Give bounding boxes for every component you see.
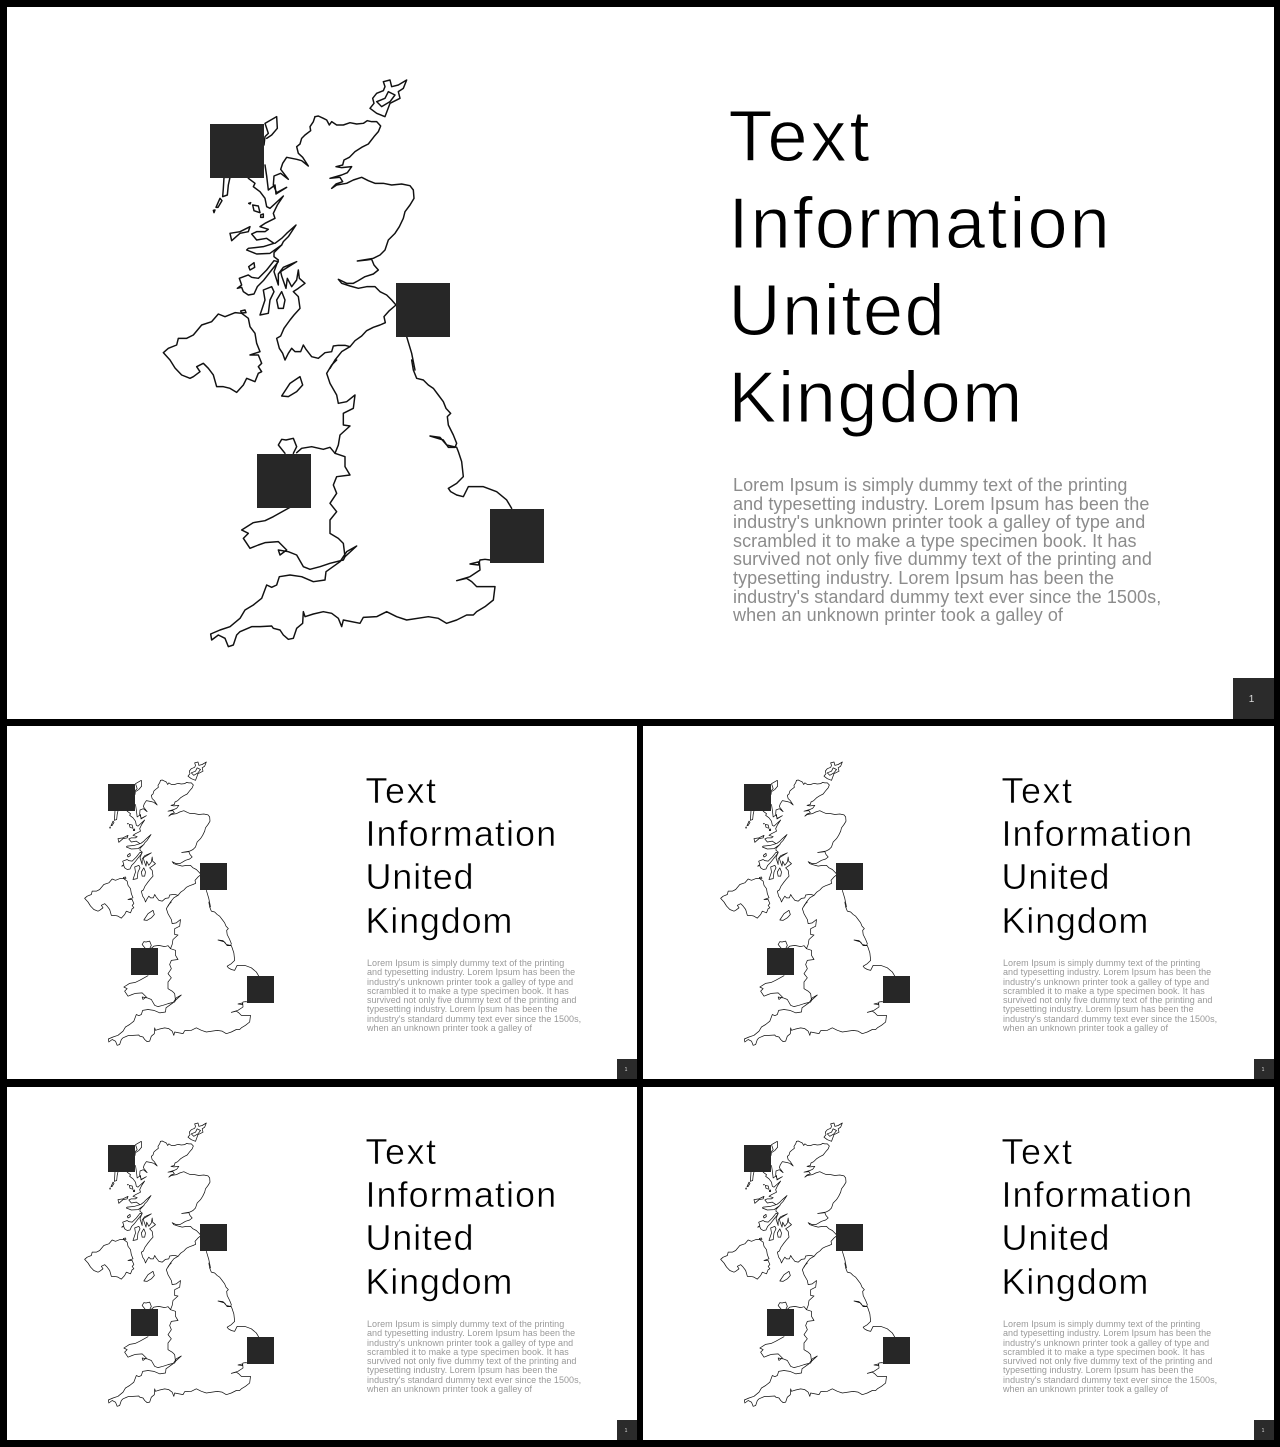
body text: typesetting industry. Lorem Ipsum has been the [733,568,1114,588]
heading: Text [1002,770,1074,810]
body text: when an unknown printer took a galley of [733,605,1063,625]
panel: thumbnail slide top right [643,726,1274,1079]
body text: and typesetting industry. Lorem Ipsum has been the [733,494,1149,514]
heading: Information [1002,1174,1193,1215]
map: United Kingdom outline [84,762,260,1046]
panel: thumbnail slide bottom right [643,1087,1274,1440]
heading: Information [1002,813,1193,854]
marker: north east England [200,863,227,890]
map: United Kingdom outline [84,1122,260,1407]
panel: thumbnail slide bottom left [7,1087,637,1440]
body text [367,958,581,1033]
body text: and typesetting industry. Lorem Ipsum has been the [367,967,575,977]
body text: Lorem Ipsum is simply dummy text of the printing [733,475,1128,495]
heading: Kingdom [366,900,513,941]
body text: scrambled it to make a type specimen book. It has [367,1347,569,1357]
heading: Kingdom [728,358,1024,438]
body text: industry's standard dummy text ever since the 1500s, [367,1014,581,1024]
heading: Text [366,1130,438,1172]
page number: 1 [1262,1067,1264,1073]
body text: typesetting industry. Lorem Ipsum has been the [367,1365,558,1375]
body text: industry's unknown printer took a galley of type and [1003,1338,1209,1348]
body text: industry's standard dummy text ever since the 1500s, [1003,1375,1217,1385]
body text: industry's standard dummy text ever since the 1500s, [733,587,1161,607]
page number [617,1420,637,1440]
body text: industry's unknown printer took a galley of type and [367,1338,573,1348]
marker: north west Scotland [108,1145,134,1172]
marker: north west Scotland [108,784,134,811]
body text [733,475,1161,625]
body text: Lorem Ipsum is simply dummy text of the printing [1003,1319,1200,1329]
body text: typesetting industry. Lorem Ipsum has been the [367,1004,558,1014]
body text: survived not only five dummy text of the printing and [733,549,1152,569]
heading: United [366,1217,474,1258]
body text [1003,1319,1217,1394]
body text: industry's unknown printer took a galley of type and [733,512,1145,532]
body text: and typesetting industry. Lorem Ipsum has been the [1003,967,1211,977]
page number [617,1059,637,1079]
body text: when an unknown printer took a galley of [367,1384,532,1394]
body text: industry's unknown printer took a galley of type and [1003,977,1209,987]
body text: survived not only five dummy text of the printing and [367,1356,576,1366]
body text: scrambled it to make a type specimen book. It has [733,531,1137,551]
body text: when an unknown printer took a galley of [367,1023,532,1033]
body text: and typesetting industry. Lorem Ipsum has been the [1003,1328,1211,1338]
heading: Kingdom [1002,900,1149,941]
body text: Lorem Ipsum is simply dummy text of the printing [1003,958,1200,968]
heading: United [728,271,946,351]
map: United Kingdom outline [720,1122,896,1407]
body text: and typesetting industry. Lorem Ipsum has been the [367,1328,575,1338]
panel: main slide [7,7,1274,719]
body text: Lorem Ipsum is simply dummy text of the printing [367,958,564,968]
heading: Kingdom [1002,1261,1149,1302]
heading [1002,1130,1193,1302]
body text: industry's unknown printer took a galley of type and [367,977,573,987]
marker: north west Scotland [210,124,264,178]
page number [1254,1420,1274,1440]
heading [1002,770,1193,941]
heading: United [366,856,474,897]
heading: Information [728,184,1112,264]
page number [1254,1059,1274,1079]
body text: Lorem Ipsum is simply dummy text of the printing [367,1319,564,1329]
body text: scrambled it to make a type specimen book. It has [1003,986,1205,996]
marker: East Anglia [247,976,274,1002]
heading: Text [1002,1130,1074,1172]
body text: survived not only five dummy text of the printing and [1003,995,1212,1005]
marker: north east England [836,1224,863,1251]
heading [728,97,1112,438]
marker: Wales [131,1309,158,1336]
marker: north west Scotland [744,784,770,811]
body text: when an unknown printer took a galley of [1003,1023,1168,1033]
map: United Kingdom outline [720,762,896,1046]
marker: East Anglia [883,976,910,1002]
heading [366,1130,557,1302]
marker: Wales [767,948,794,975]
marker: Wales [767,1309,794,1336]
body text: typesetting industry. Lorem Ipsum has been the [1003,1004,1194,1014]
marker: north east England [836,863,863,890]
marker: Wales [131,948,158,975]
body text [1003,958,1217,1033]
marker: East Anglia [490,509,544,563]
page number: 1 [625,1067,627,1073]
body text: scrambled it to make a type specimen book. It has [1003,1347,1205,1357]
heading: Kingdom [366,1261,513,1302]
heading: Information [366,1174,557,1215]
body text: typesetting industry. Lorem Ipsum has been the [1003,1365,1194,1375]
heading: United [1002,1217,1110,1258]
body text: industry's standard dummy text ever since the 1500s, [367,1375,581,1385]
body text [367,1319,581,1394]
heading [366,770,557,941]
page number [1233,678,1274,719]
panel: thumbnail slide top left [7,726,637,1079]
heading: United [1002,856,1110,897]
heading: Text [728,97,873,177]
map: United Kingdom outline [162,79,512,648]
marker: East Anglia [247,1336,274,1364]
marker: north east England [396,283,450,337]
page number: 1 [1249,694,1254,705]
heading: Text [366,770,438,810]
marker: East Anglia [883,1336,910,1364]
body text: scrambled it to make a type specimen book. It has [367,986,569,996]
marker: north east England [200,1224,227,1251]
heading: Information [366,813,557,854]
page number: 1 [625,1428,627,1434]
marker: north west Scotland [744,1145,770,1172]
body text: when an unknown printer took a galley of [1003,1384,1168,1394]
body text: survived not only five dummy text of the printing and [1003,1356,1212,1366]
page number: 1 [1262,1428,1264,1434]
body text: survived not only five dummy text of the printing and [367,995,576,1005]
body text: industry's standard dummy text ever since the 1500s, [1003,1014,1217,1024]
marker: Wales [257,454,311,508]
